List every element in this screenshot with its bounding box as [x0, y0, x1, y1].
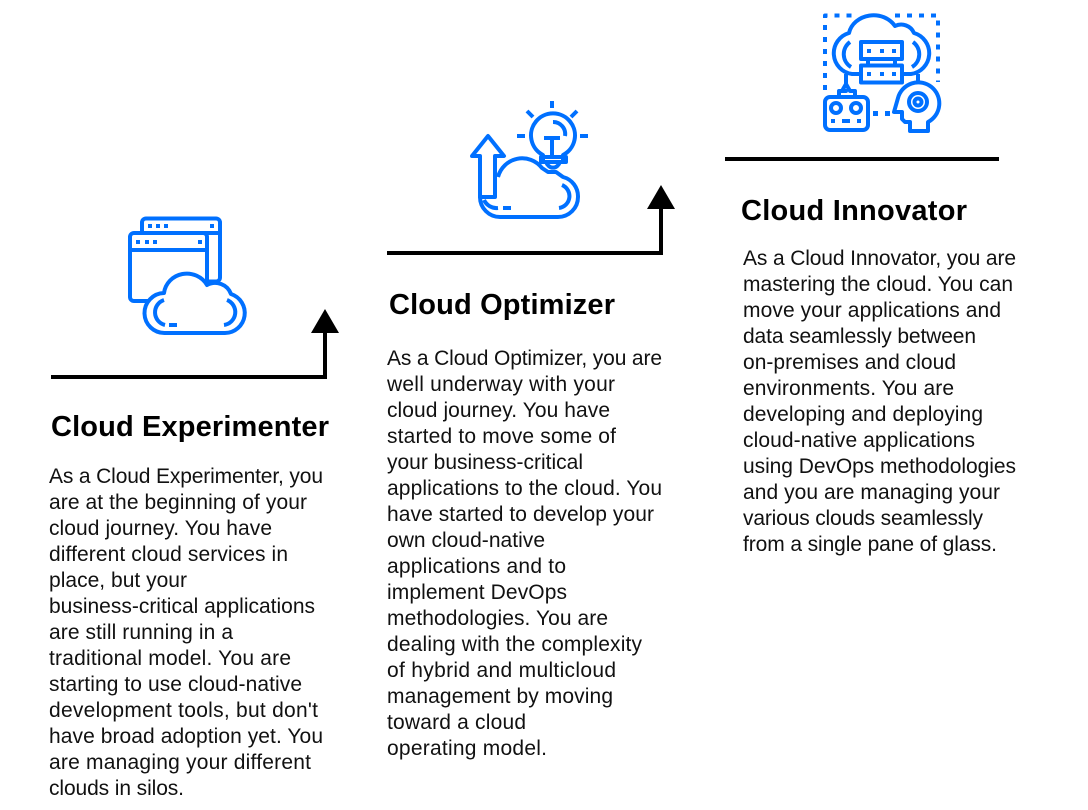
arrow: step one: [51, 309, 339, 377]
text block: Cloud Innovator description: on-premises and cloud: [743, 351, 956, 374]
text block: Cloud Optimizer description: of hybrid and multicloud: [387, 659, 616, 682]
text block: Cloud Optimizer description: dealing with the complexity: [387, 633, 642, 656]
text block: Cloud Optimizer description: own cloud-native: [387, 529, 545, 552]
text block: Cloud Innovator description: mastering the cloud. You can: [743, 273, 1013, 296]
text block: Cloud Optimizer description: applications to the cloud. You: [387, 477, 662, 500]
text block: Cloud Experimenter description: have broad adoption yet. You: [49, 725, 323, 748]
text block: Cloud Innovator description: cloud-native applications: [743, 429, 975, 452]
text block: Cloud Experimenter description: are managing your different: [49, 751, 311, 774]
text block: Cloud Optimizer description: management by moving: [387, 685, 613, 708]
text block: Cloud Optimizer description: As a Cloud Optimizer, you are: [387, 347, 662, 370]
text block: Cloud Innovator description: using DevOps methodologies: [743, 455, 1016, 478]
text block: Cloud Innovator description: environments. You are: [743, 377, 954, 400]
text block: Cloud Innovator description: data seamlessly between: [743, 325, 976, 348]
text block: Cloud Experimenter description: business-critical applications: [49, 595, 315, 618]
text block: Cloud Optimizer description: have started to develop your: [387, 503, 654, 526]
text block: Cloud Optimizer description: operating model.: [387, 737, 547, 760]
text block: Cloud Innovator description: from a single pane of glass.: [743, 533, 997, 556]
text block: Cloud Optimizer description: started to move some of: [387, 425, 616, 448]
text block: Cloud Experimenter description: cloud journey. You have: [49, 517, 272, 540]
text block: Cloud Experimenter description: traditional model. You are: [49, 647, 291, 670]
text block: Cloud Innovator description: and you are managing your: [743, 481, 1000, 504]
heading: Cloud Optimizer: Cloud Optimizer: [389, 289, 615, 321]
text block: Cloud Optimizer description: cloud journey. You have: [387, 399, 610, 422]
text block: Cloud Innovator description: move your applications and: [743, 299, 1001, 322]
panel: Cloud Optimizer: [386, 101, 675, 760]
heading: Cloud Innovator: Cloud Innovator: [741, 195, 967, 227]
icon: cloud with light bulb and up arrow: [472, 101, 588, 217]
arrow: step two: [387, 185, 675, 253]
text block: Cloud Experimenter description: As a Cloud Experimenter, you: [49, 465, 323, 488]
text block: Cloud Innovator description: developing and deploying: [743, 403, 983, 426]
text block: Cloud Experimenter description: are at the beginning of your: [49, 491, 307, 514]
text block: Cloud Experimenter description: different cloud services in: [49, 543, 288, 566]
text block: Cloud Optimizer description: your business-critical: [387, 451, 583, 474]
panel: Cloud Experimenter: [49, 218, 339, 800]
text block: Cloud Optimizer description: applications and to: [387, 555, 566, 578]
text block: Cloud Experimenter description: development tools, but don't: [49, 699, 318, 722]
panel: Cloud Innovator: [725, 15, 1016, 556]
text block: Cloud Experimenter description: clouds in silos.: [49, 777, 184, 800]
text block: Cloud Optimizer description: well underway with your: [386, 373, 615, 396]
divider line: step three: [725, 157, 999, 161]
text block: Cloud Experimenter description: place, but your: [49, 569, 187, 592]
text block: Cloud Optimizer description: methodologies. You are: [387, 607, 608, 630]
text block: Cloud Innovator description: various clouds seamlessly: [743, 507, 984, 530]
icon: browser windows with cloud: [130, 218, 245, 333]
heading: Cloud Experimenter: Cloud Experimenter: [51, 411, 329, 443]
icon: cloud servers with robot and human head: [825, 15, 939, 131]
text block: Cloud Innovator description: [743, 247, 1016, 556]
text block: Cloud Experimenter description: are still running in a: [49, 621, 233, 644]
text block: Cloud Optimizer description: [386, 347, 662, 760]
text block: Cloud Innovator description: As a Cloud Innovator, you are: [743, 247, 1016, 270]
text block: Cloud Experimenter description: [49, 465, 323, 800]
text block: Cloud Experimenter description: starting to use cloud-native: [49, 673, 302, 696]
text block: Cloud Optimizer description: implement DevOps: [387, 581, 567, 604]
text block: Cloud Optimizer description: toward a cloud: [387, 711, 526, 734]
